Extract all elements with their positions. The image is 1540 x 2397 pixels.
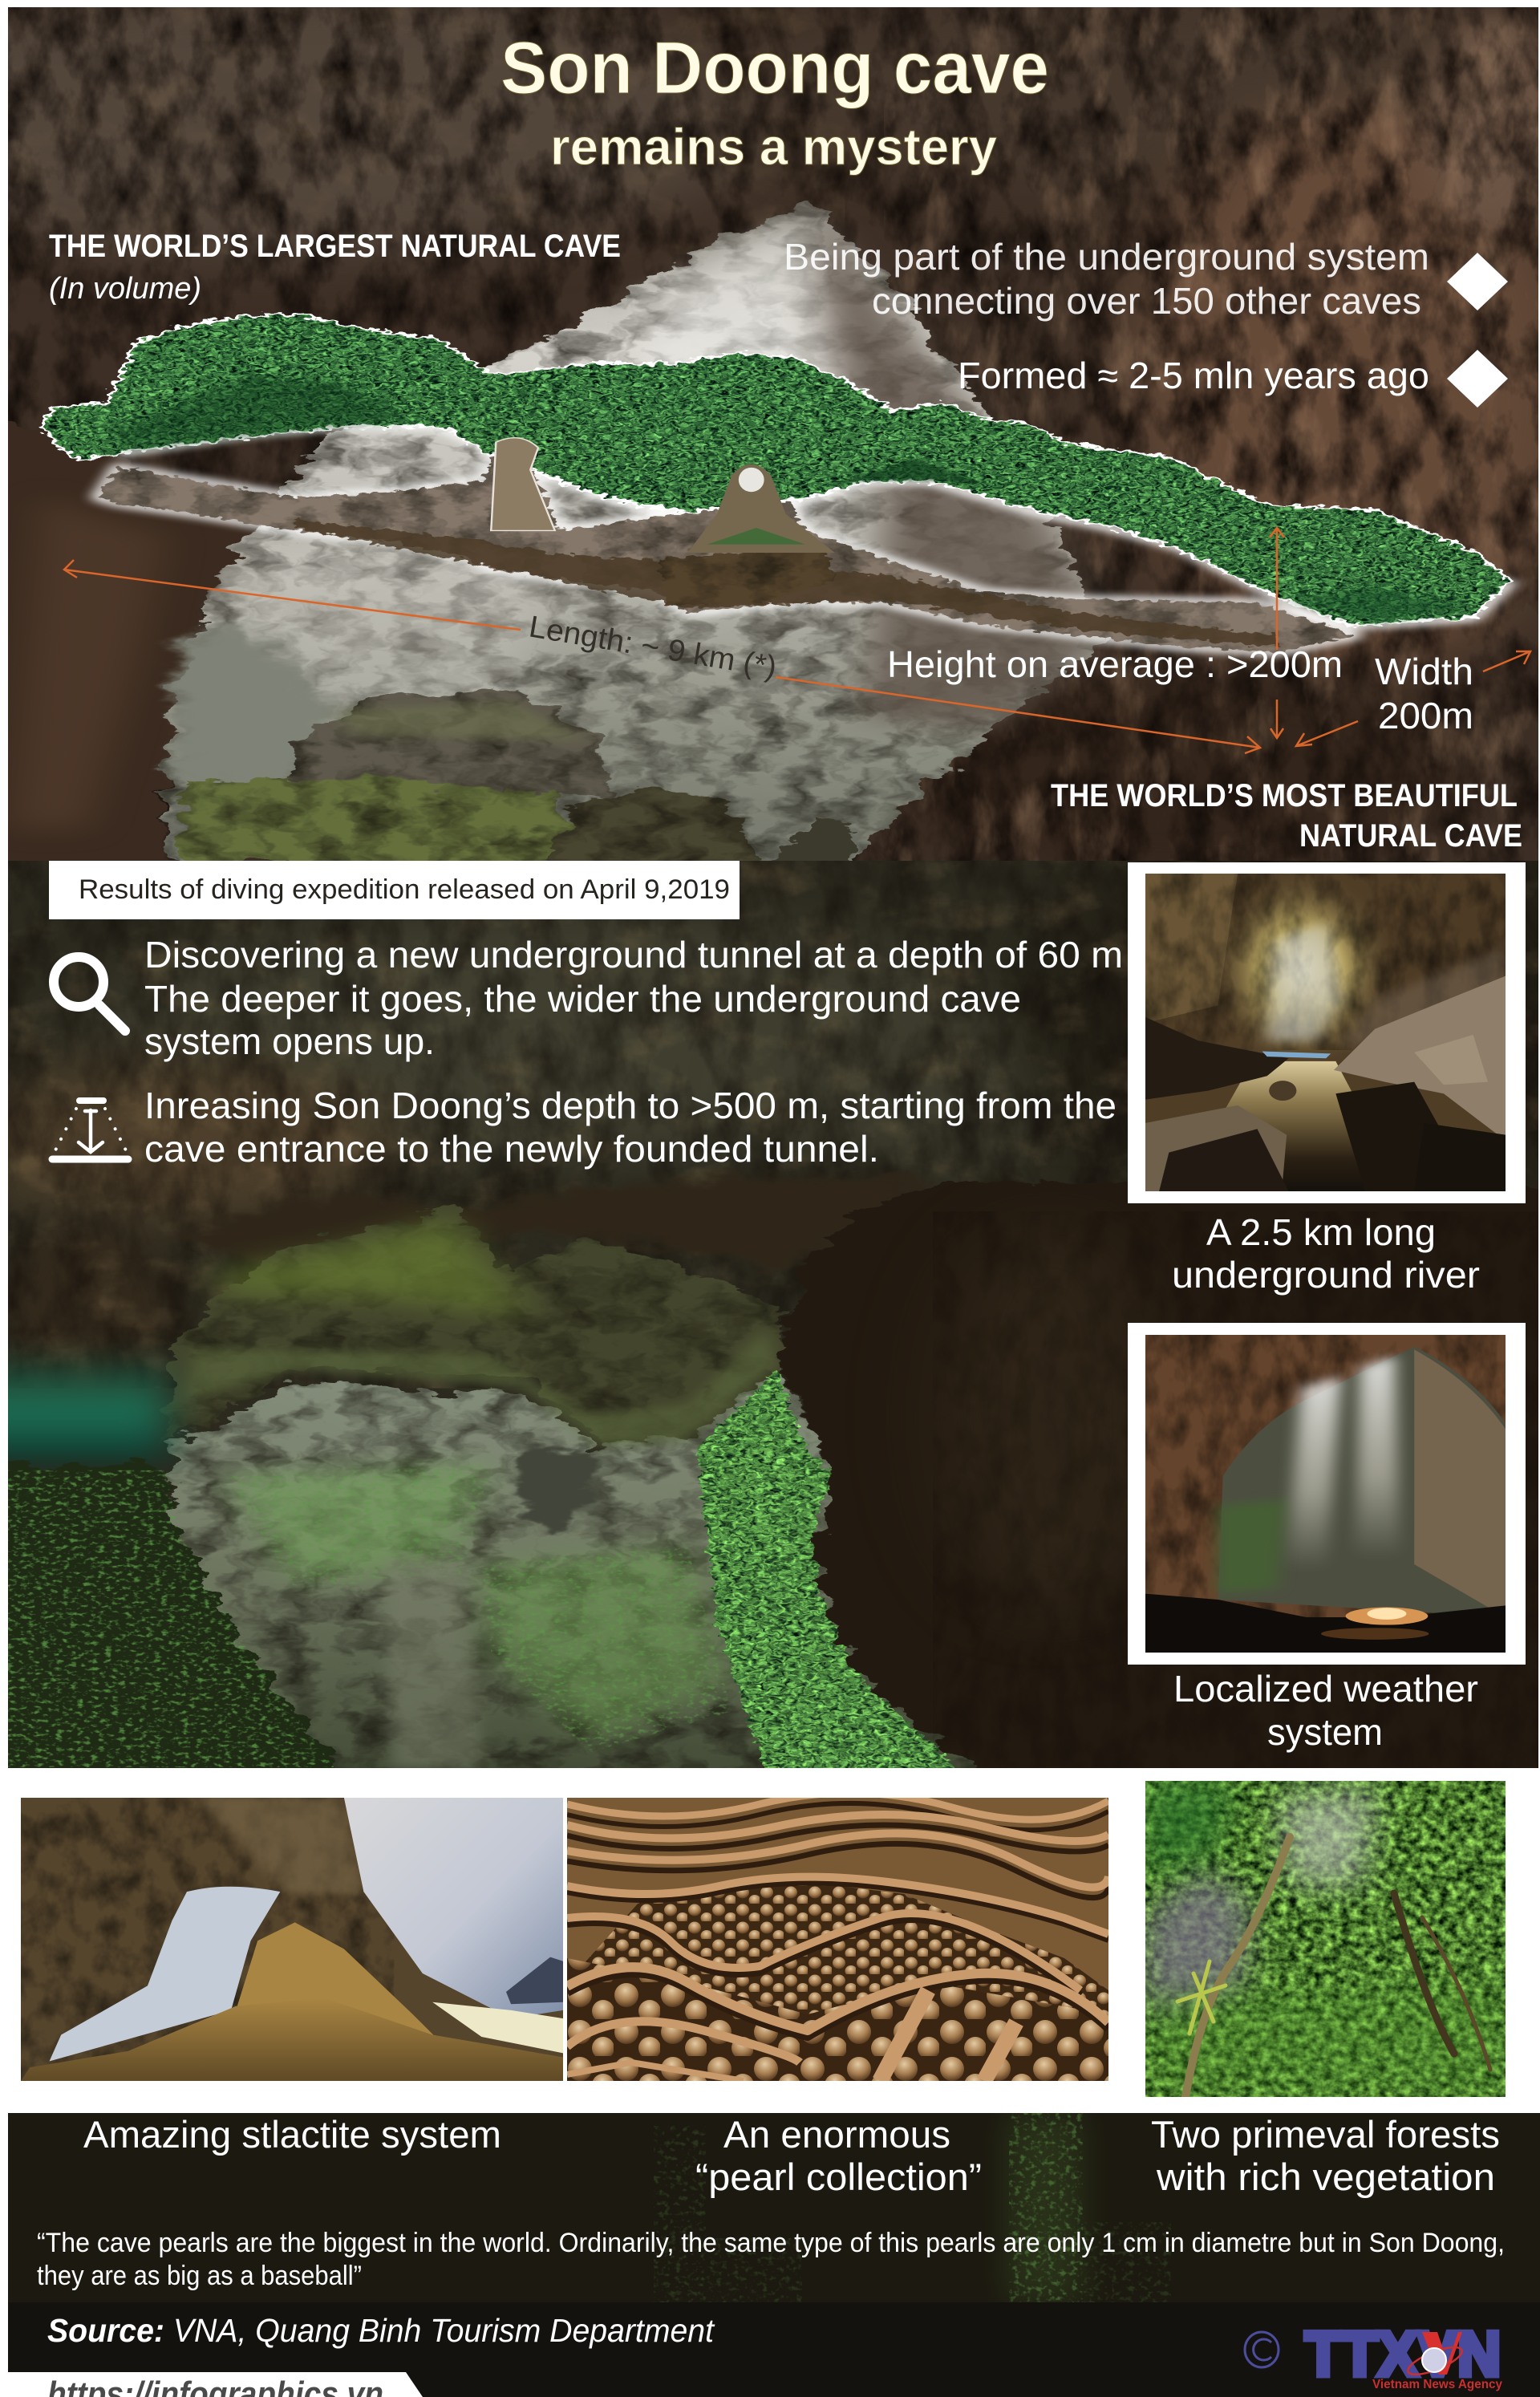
photo: stalactite system (21, 1798, 563, 2081)
footer background (8, 2302, 1540, 2397)
photo: localized weather (1128, 1323, 1526, 1665)
source: Source: VNA, Quang Binh Tourism Department (47, 2312, 715, 2349)
panel: footer (0, 2302, 1540, 2397)
copyright mark (1245, 2332, 1279, 2367)
text: depth increase (144, 1085, 1116, 1170)
lower cave passage (98, 442, 1356, 652)
fact: underground system: connecting over 150 other caves (872, 280, 1421, 322)
heading: world's largest natural cave (49, 229, 621, 306)
caption: underground river (1172, 1211, 1480, 1296)
photo: primeval forest (1145, 1781, 1506, 2097)
panel: cave hero section (0, 0, 1540, 884)
panel: captions band (0, 2113, 1540, 2302)
quote: they are as big as a baseball” (37, 2261, 362, 2291)
caption: weather: system (1267, 1711, 1383, 1753)
boulders and moss (176, 625, 853, 868)
label: width: Width (1375, 651, 1473, 692)
caption: pearls (695, 2113, 982, 2198)
caption: forests: Two primeval forests (1151, 2113, 1500, 2156)
title (500, 27, 1049, 176)
caption: forests (1151, 2113, 1500, 2198)
fact: underground system (784, 236, 1429, 322)
text: new tunnel (144, 934, 1123, 1062)
length arrow (64, 560, 1260, 753)
logo: TTXVN: Vietnam News Agency (1372, 2378, 1502, 2391)
text: new tunnel: Discovering a new underground tunnel at a depth of 60 m (144, 934, 1123, 975)
label: width (1375, 651, 1473, 736)
heading: most beautiful natural cave (1051, 778, 1522, 854)
upper green forest surface (44, 315, 1508, 625)
heading: most beautiful natural cave: NATURAL CAVE (1299, 818, 1522, 854)
heading: world's largest natural cave: THE WORLD’S LARGEST NATURAL CAVE (49, 229, 621, 264)
caption: pearls: An enormous (723, 2113, 950, 2156)
text: new tunnel: system opens up. (144, 1020, 435, 1062)
icon: diamond 1 (1447, 253, 1508, 310)
caption: pearls: “pearl collection” (695, 2156, 982, 2198)
heading: world's largest natural cave: (In volume) (49, 272, 201, 306)
hero rock background (0, 0, 1540, 884)
label: height: Height on average : >200m (887, 643, 1343, 685)
light opening (167, 205, 1110, 862)
left pillar rock (0, 415, 250, 874)
width arrow (1296, 651, 1530, 746)
logo: TTXVN: TTXVN (1305, 2318, 1501, 2389)
photo: underground river (1128, 862, 1526, 1203)
caption: weather: Localized weather (1173, 1668, 1478, 1710)
label: length: Length: ~ 9 km (*) (527, 610, 779, 684)
glow around cave shape (98, 426, 1513, 652)
icon: depth measure (52, 1101, 128, 1159)
cave cross-section illustration (44, 315, 1513, 652)
date banner (49, 861, 740, 919)
expedition background photo (0, 800, 1540, 1776)
label: width: 200m (1378, 695, 1473, 736)
karst pillars (491, 438, 555, 530)
panel: diving expedition results (0, 800, 1540, 1776)
panel: photo strip (21, 1781, 1506, 2097)
quote (37, 2228, 1505, 2291)
photo: cave pearls (567, 1798, 1108, 2081)
date banner: Results of diving expedition released on April 9,2019 (79, 874, 730, 905)
text: new tunnel: The deeper it goes, the wider the underground cave (144, 978, 1021, 1020)
band background (0, 2113, 1540, 2302)
icon: magnifying glass (54, 957, 125, 1031)
text: depth increase: Inreasing Son Doong’s depth to >500 m, starting from the (144, 1085, 1116, 1126)
fact: underground system: Being part of the underground system (784, 236, 1429, 278)
caption: weather (1173, 1668, 1478, 1753)
caption: underground river: A 2.5 km long (1206, 1211, 1436, 1253)
text: depth increase: cave entrance to the newly founded tunnel. (144, 1128, 879, 1170)
caption: stalactite: Amazing stlactite system (83, 2113, 501, 2156)
title: remains a mystery (550, 118, 997, 176)
caption: forests: with rich vegetation (1156, 2156, 1495, 2198)
title: Son Doong cave (500, 27, 1049, 109)
caption: underground river: underground river (1172, 1254, 1480, 1296)
height arrow (1270, 528, 1284, 738)
icon: diamond 2 (1447, 350, 1508, 408)
fact: formed: Formed ≈ 2-5 mln years ago (958, 355, 1429, 396)
